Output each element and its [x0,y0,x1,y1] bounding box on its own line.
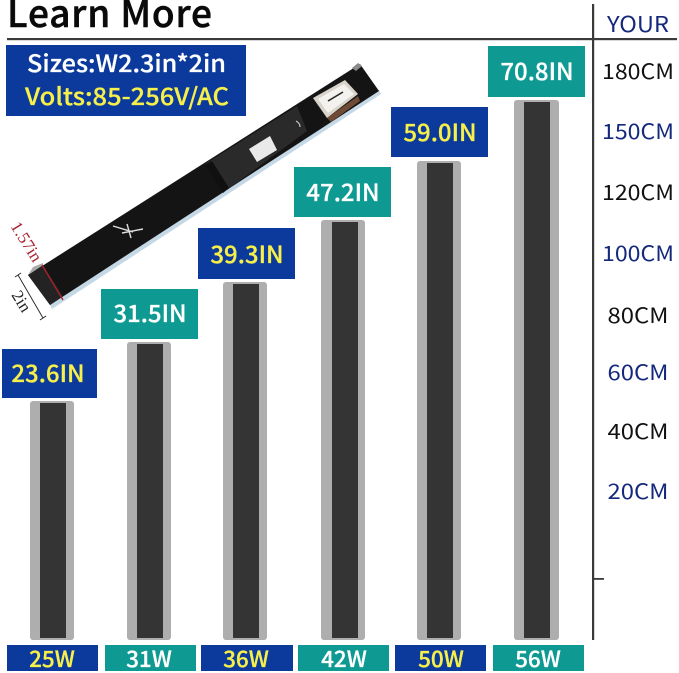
length labels [2,46,585,398]
bar: 36W fixture [223,282,267,640]
scale: 20CM: 20CM [608,476,668,506]
label: 59.0IN [391,107,488,157]
wattage: 25W [7,642,98,673]
label: 70.8IN [488,46,585,97]
wattage: 31W [105,642,196,673]
header: YOUR: YOUR [606,7,669,39]
wattage: 36W [201,642,293,673]
wattage: 42W [298,642,389,673]
callout: sizes and volts: Volts:85-256V/AC [24,77,229,112]
scale: 180CM: 180CM [602,56,674,86]
scale: 80CM: 80CM [608,300,668,330]
product photo: open fixture [28,63,381,309]
wattage: 50W [395,642,486,673]
label: 39.3IN [198,228,295,279]
bar: 50W fixture [417,161,461,640]
label: 39.3IN: 39.3IN [210,235,284,270]
label: 47.2IN: 47.2IN [306,173,380,208]
label: 31.5IN: 31.5IN [113,294,187,329]
callout: sizes and volts [6,44,246,116]
wattage labels [7,642,584,673]
height scale [602,56,674,506]
callout: sizes and volts: Sizes:W2.3in*2in [27,44,226,79]
label: 23.6IN [2,349,97,398]
bar: 42W fixture [321,220,365,640]
scale: 40CM: 40CM [608,416,668,446]
dimension: 2in [8,273,46,320]
wattage: 56W [493,642,584,673]
label: 47.2IN [294,167,391,217]
label: 31.5IN [101,289,198,339]
dimension: 2in: 2in [8,287,35,316]
bar: 56W fixture [514,100,559,640]
scale: 60CM: 60CM [608,357,668,387]
bar: 25W fixture [30,401,74,640]
label: 23.6IN: 23.6IN [11,354,85,389]
dimension: 1.57in [7,218,63,300]
scale: 120CM: 120CM [602,177,674,207]
dimension: 1.57in: 1.57in [7,218,46,266]
label: 59.0IN: 59.0IN [403,113,477,148]
scale: 100CM: 100CM [602,238,674,268]
label: 70.8IN: 70.8IN [500,52,574,87]
bar: 31W fixture [127,342,171,640]
scale: 150CM: 150CM [602,116,674,146]
